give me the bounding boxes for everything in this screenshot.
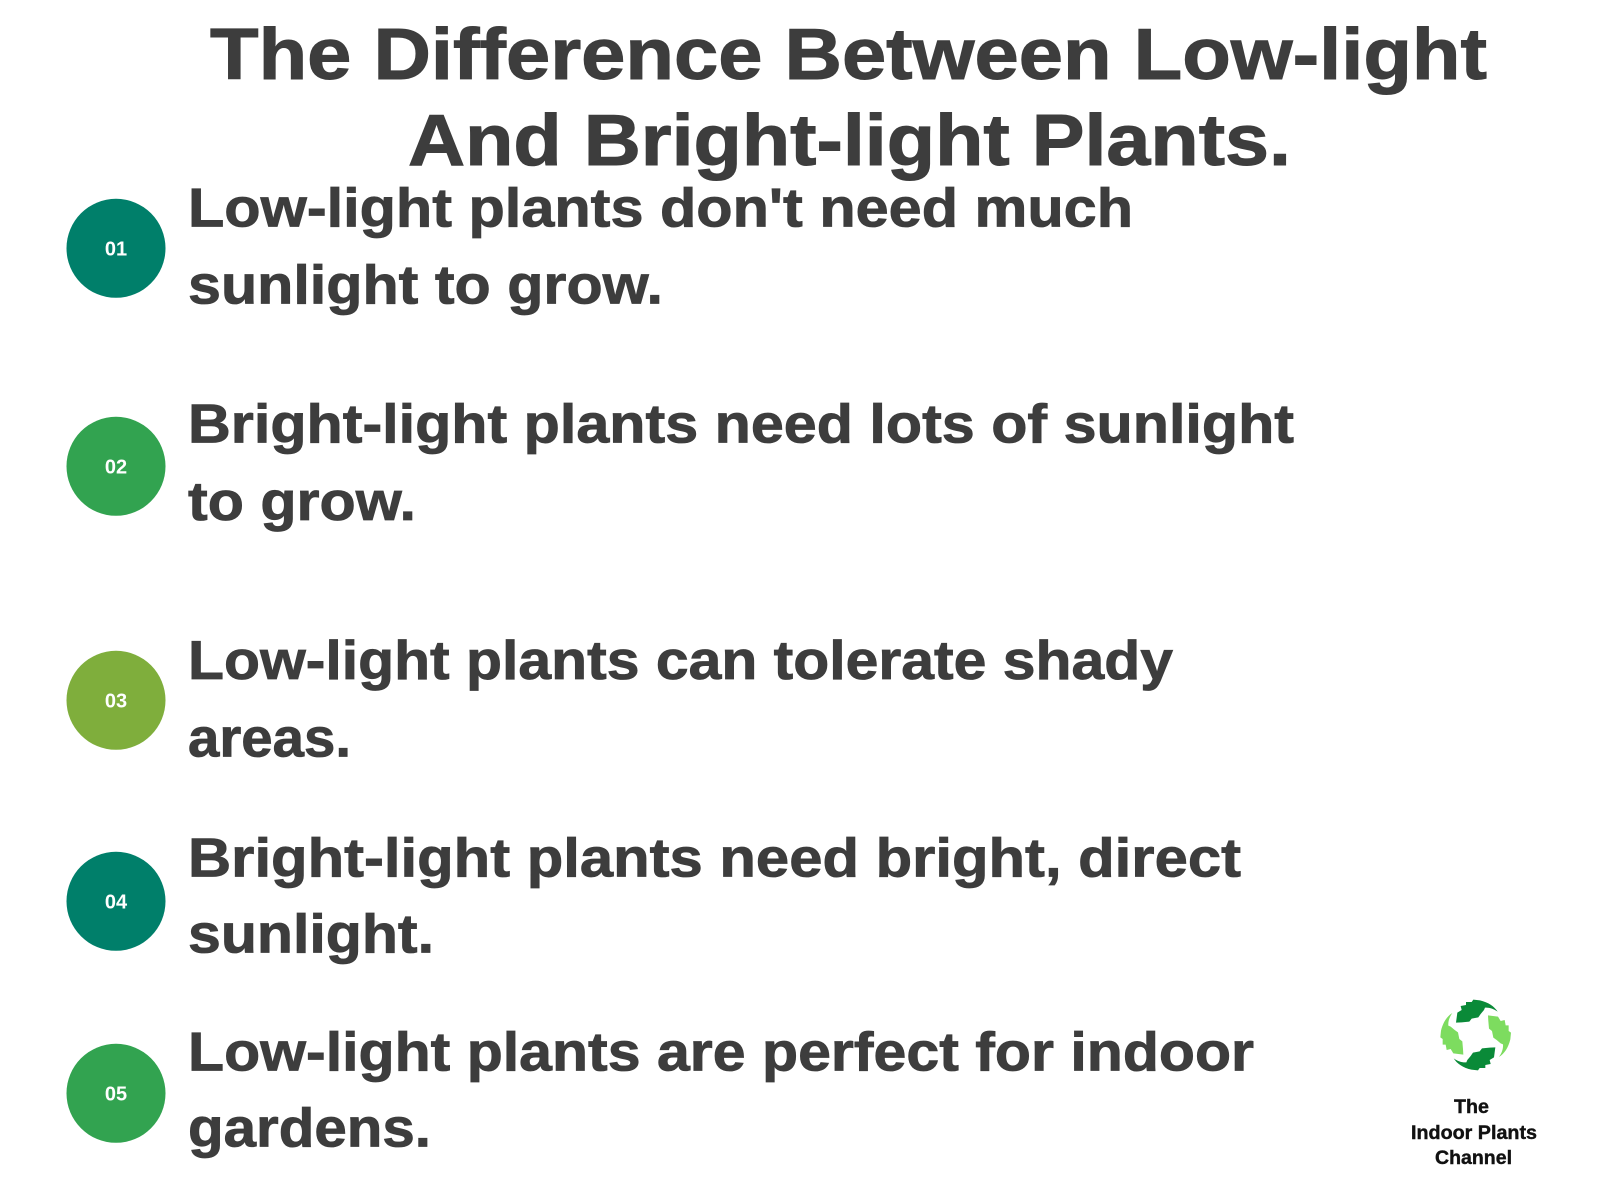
badge 03	[66, 651, 166, 750]
badge 04	[66, 852, 166, 951]
badge 03: 03	[105, 690, 127, 712]
logo text	[1411, 1097, 1537, 1169]
text 04	[188, 827, 1241, 964]
text 01: Low-light plants don't need much	[188, 177, 1133, 239]
text 04: Bright-light plants need bright, direct	[188, 827, 1241, 889]
logo	[1411, 1000, 1537, 1169]
text 03: Low-light plants can tolerate shady	[188, 629, 1173, 691]
badge 02: 02	[105, 456, 127, 478]
logo text: The	[1454, 1097, 1489, 1118]
badge 04: 04	[105, 892, 128, 914]
text 01: sunlight to grow.	[188, 254, 663, 316]
item 05	[66, 1021, 1254, 1159]
item 01	[66, 177, 1133, 316]
logo text: Indoor Plants	[1411, 1123, 1537, 1144]
text 02	[188, 392, 1294, 532]
title: And Bright-light Plants.	[408, 100, 1291, 181]
icon: four leaves	[1440, 1000, 1511, 1070]
text 01	[188, 177, 1133, 316]
text 04: sunlight.	[188, 902, 434, 964]
title	[210, 14, 1487, 181]
badge 01	[66, 199, 166, 298]
text 03: areas.	[188, 707, 351, 769]
text 05: Low-light plants are perfect for indoor	[188, 1021, 1254, 1083]
item 04	[66, 827, 1241, 964]
text 02: to grow.	[188, 470, 416, 532]
item 02	[66, 392, 1294, 532]
item 03	[66, 629, 1173, 769]
text 05: gardens.	[188, 1097, 431, 1159]
badge 05	[66, 1044, 166, 1143]
title: The Difference Between Low-light	[210, 14, 1487, 95]
text 05	[188, 1021, 1254, 1159]
logo text: Channel	[1435, 1148, 1512, 1169]
text 03	[188, 629, 1173, 769]
badge 05: 05	[105, 1084, 127, 1106]
badge 02	[66, 417, 166, 516]
text 02: Bright-light plants need lots of sunlight	[188, 392, 1294, 454]
badge 01: 01	[105, 238, 127, 260]
